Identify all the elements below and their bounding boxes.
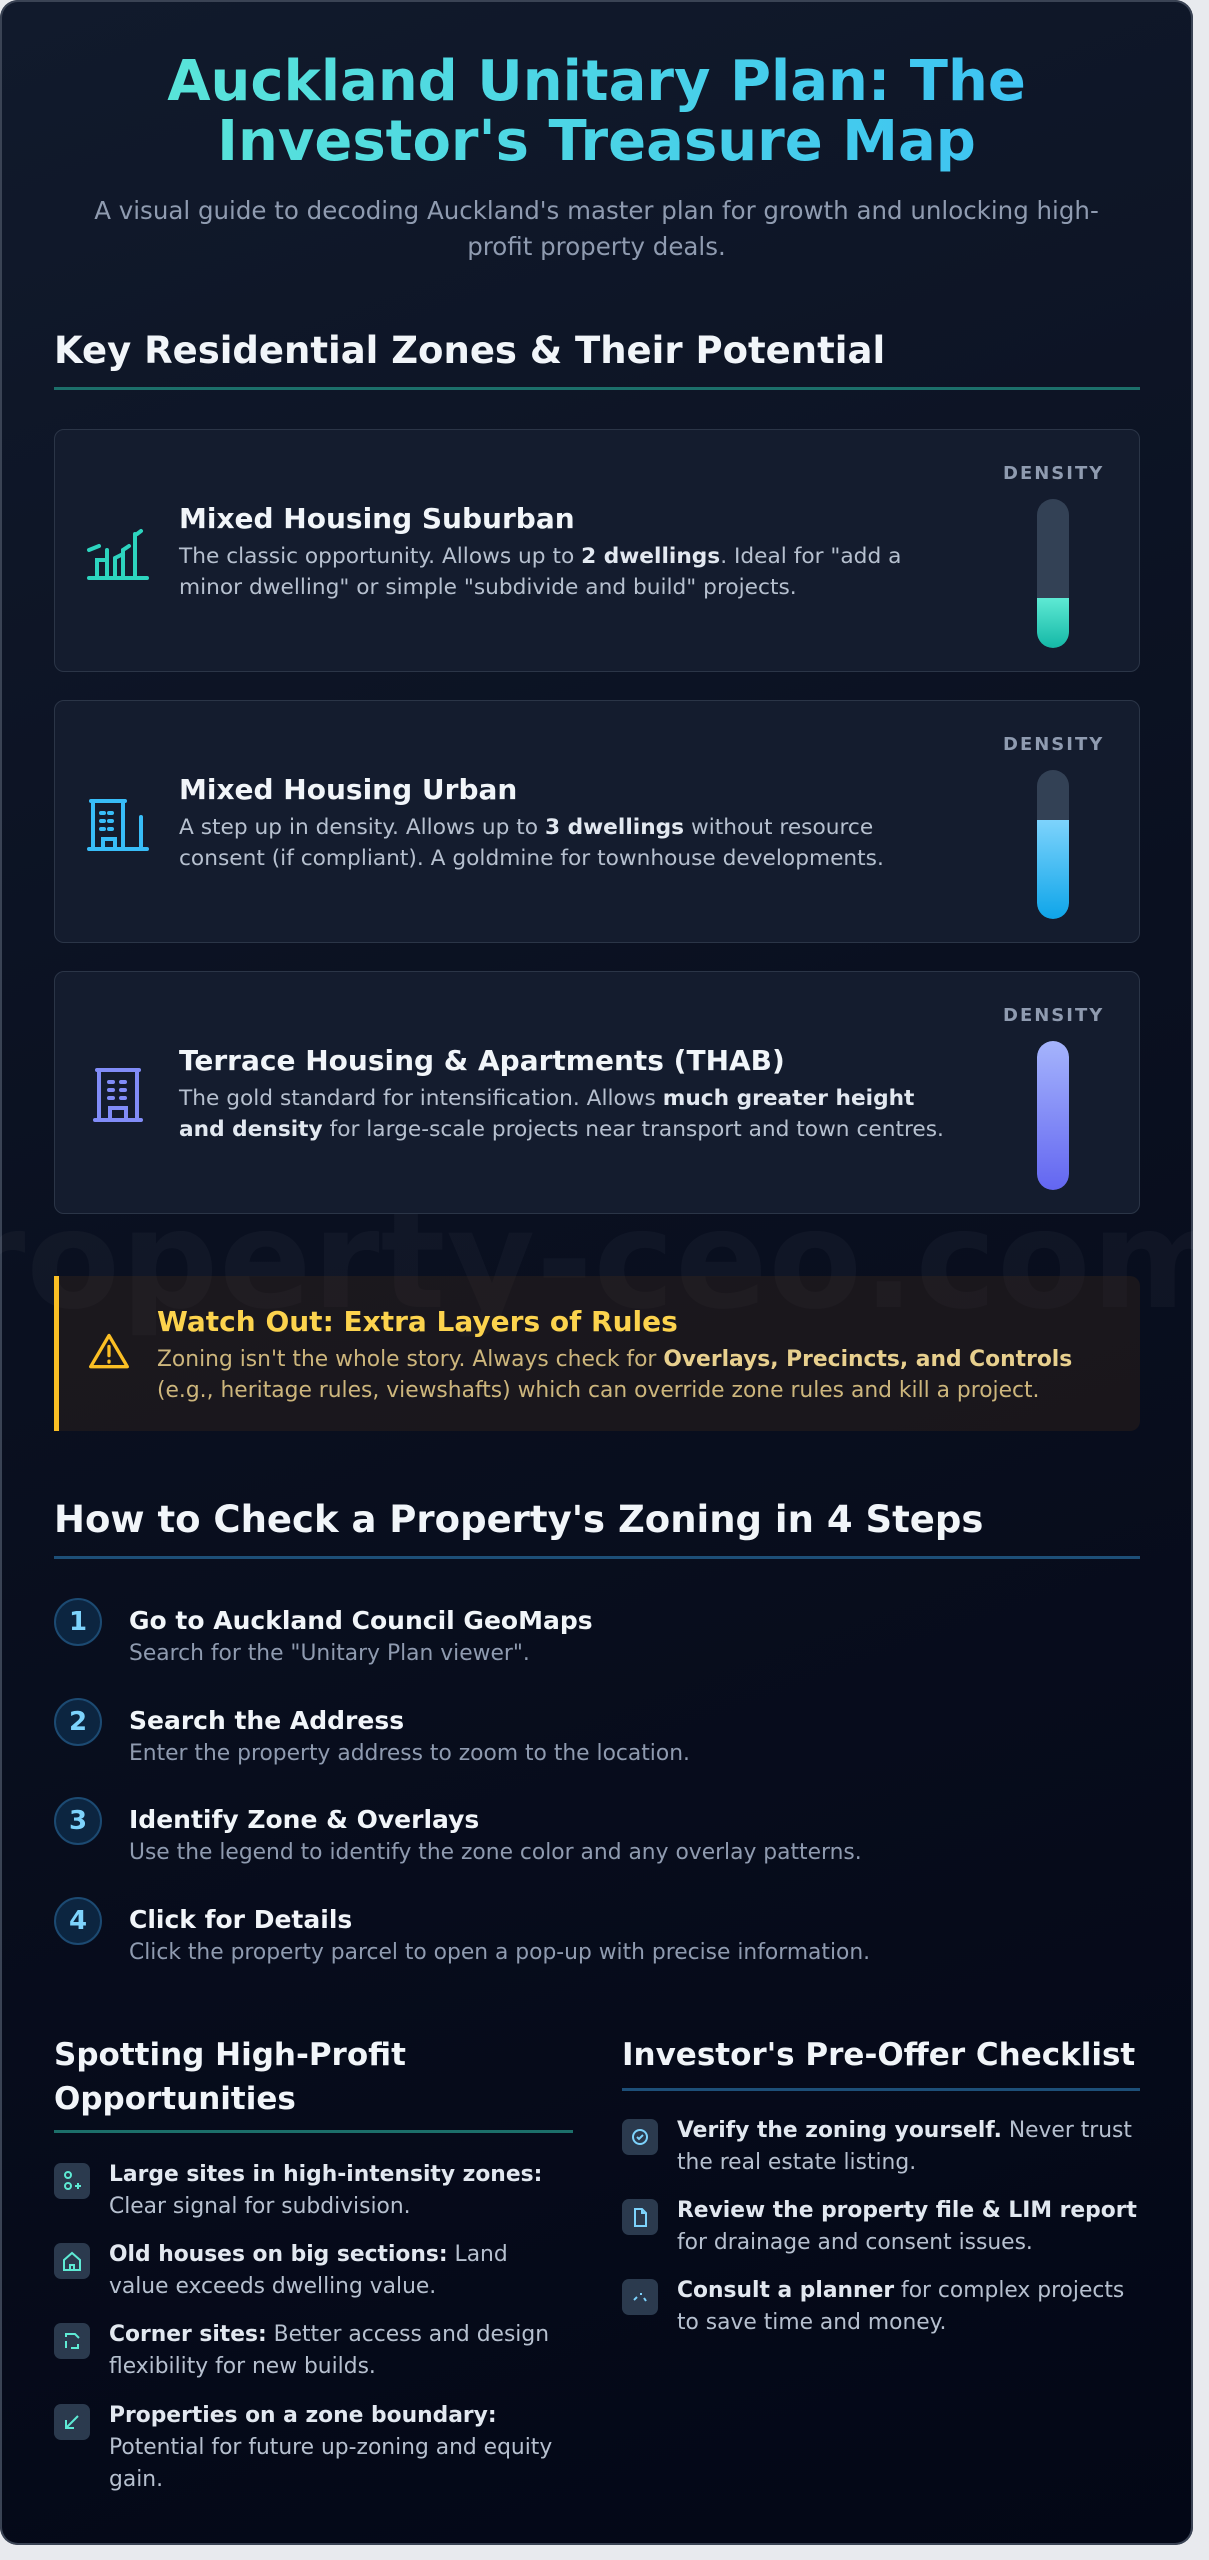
step 4 (54, 1897, 870, 1965)
panel: pre-offer checklist: Verify the zoning yourself. Never trust (677, 2118, 1132, 2143)
step 3: Use the legend to identify the zone color and any overlay patterns. (129, 1840, 862, 1865)
step 3 (54, 1797, 862, 1865)
callout text: Zoning isn't the whole story. Always check for Overlays, Precincts, and Controls (e.g., heritage rules, viewshafts) which can override zone rules and kill a project. (157, 1347, 1072, 1403)
zone title: Mixed Housing Suburban (179, 502, 575, 535)
panel: pre-offer checklist: the real estate listing. (677, 2150, 916, 2175)
panel: high-profit opportunities (54, 2037, 573, 2492)
step 2: Enter the property address to zoom to the location. (129, 1741, 690, 1766)
icon: suburban (86, 528, 149, 580)
panel: high-profit opportunities: gain. (109, 2467, 163, 2492)
zone title: Mixed Housing Urban (179, 773, 517, 806)
step 2: 2 (69, 1707, 87, 1737)
title: Investor's Treasure Map (217, 109, 976, 174)
subtitle: A visual guide to decoding Auckland's master plan for growth and unlocking high-profit property deals. (94, 196, 1099, 261)
heading: Investor's Pre-Offer Checklist (622, 2037, 1135, 2073)
icon: urban building (87, 799, 149, 851)
item: corner sites (54, 2322, 549, 2379)
density meter (1003, 1005, 1104, 1190)
zone description: The classic opportunity. Allows up to 2 dwellings. Ideal for "add a minor dwelling" or simple "subdivide and build" projects. (179, 544, 901, 600)
step 3: 3 (69, 1806, 87, 1836)
panel: pre-offer checklist: Consult a planner for complex projects (677, 2278, 1124, 2303)
title: Auckland Unitary Plan: The (167, 49, 1026, 114)
panel: mixed housing urban (54, 700, 1140, 943)
panel: high-profit opportunities: Clear signal for subdivision. (109, 2194, 411, 2219)
step 2 (54, 1698, 690, 1766)
zone description: A step up in density. Allows up to 3 dwellings without resource consent (if compliant). A goldmine for townhouse developments. (179, 815, 884, 871)
density meter (1003, 463, 1104, 648)
panel: pre-offer checklist: Review the property file & LIM report (677, 2198, 1137, 2223)
item: planner (622, 2278, 1124, 2335)
density meter (1003, 734, 1104, 919)
panel: pre-offer checklist (622, 2037, 1140, 2335)
panel: high-profit opportunities: Large sites in high-intensity zones: (109, 2162, 542, 2187)
icon: warning (88, 1334, 129, 1368)
heading (54, 2037, 406, 2117)
step 4: Click the property parcel to open a pop-up with precise information. (129, 1940, 870, 1965)
panel: high-profit opportunities: Corner sites: Better access and design (109, 2322, 549, 2347)
heading: Opportunities (54, 2081, 296, 2117)
panel: high-profit opportunities: flexibility for new builds. (109, 2354, 376, 2379)
panel: high-profit opportunities: Potential for future up-zoning and equity (109, 2435, 552, 2460)
item: zone boundary (54, 2403, 552, 2492)
step 1: 1 (69, 1607, 87, 1637)
step 3: Identify Zone & Overlays (129, 1805, 479, 1834)
panel: THAB: DENSITY (1003, 1005, 1104, 1026)
panel: mixed housing suburban (54, 429, 1140, 672)
heading: Spotting High-Profit (54, 2037, 406, 2073)
item: verify zoning (622, 2118, 1132, 2175)
step 4: Click for Details (129, 1905, 352, 1934)
panel: high-profit opportunities: value exceeds dwelling value. (109, 2274, 436, 2299)
step 1: Go to Auckland Council GeoMaps (129, 1606, 593, 1635)
callout title: Watch Out: Extra Layers of Rules (157, 1305, 678, 1338)
panel: pre-offer checklist: to save time and money. (677, 2310, 946, 2335)
panel: mixed housing suburban: DENSITY (1003, 463, 1104, 484)
icon: apartments (93, 1068, 143, 1122)
step 2: Search the Address (129, 1706, 404, 1735)
item: property file (622, 2198, 1137, 2255)
step 4: 4 (69, 1906, 87, 1936)
title (0, 52, 1193, 172)
item: large sites (54, 2162, 542, 2219)
step 1 (54, 1598, 593, 1666)
zone description: The gold standard for intensification. Allows much greater height and density for large-scale projects near transport and town centres. (179, 1086, 944, 1142)
item: old houses (54, 2242, 508, 2299)
zone title: Terrace Housing & Apartments (THAB) (179, 1044, 785, 1077)
callout: watch out (54, 1276, 1140, 1431)
heading: 4 steps: How to Check a Property's Zoning in 4 Steps (54, 1498, 983, 1541)
step 1: Search for the "Unitary Plan viewer". (129, 1641, 530, 1666)
panel: high-profit opportunities: Old houses on big sections: Land (109, 2242, 508, 2267)
panel: THAB (54, 971, 1140, 1214)
heading: key residential zones: Key Residential Zones & Their Potential (54, 329, 885, 372)
panel: pre-offer checklist: for drainage and consent issues. (677, 2230, 1033, 2255)
panel: mixed housing urban: DENSITY (1003, 734, 1104, 755)
panel: high-profit opportunities: Properties on a zone boundary: (109, 2403, 497, 2428)
